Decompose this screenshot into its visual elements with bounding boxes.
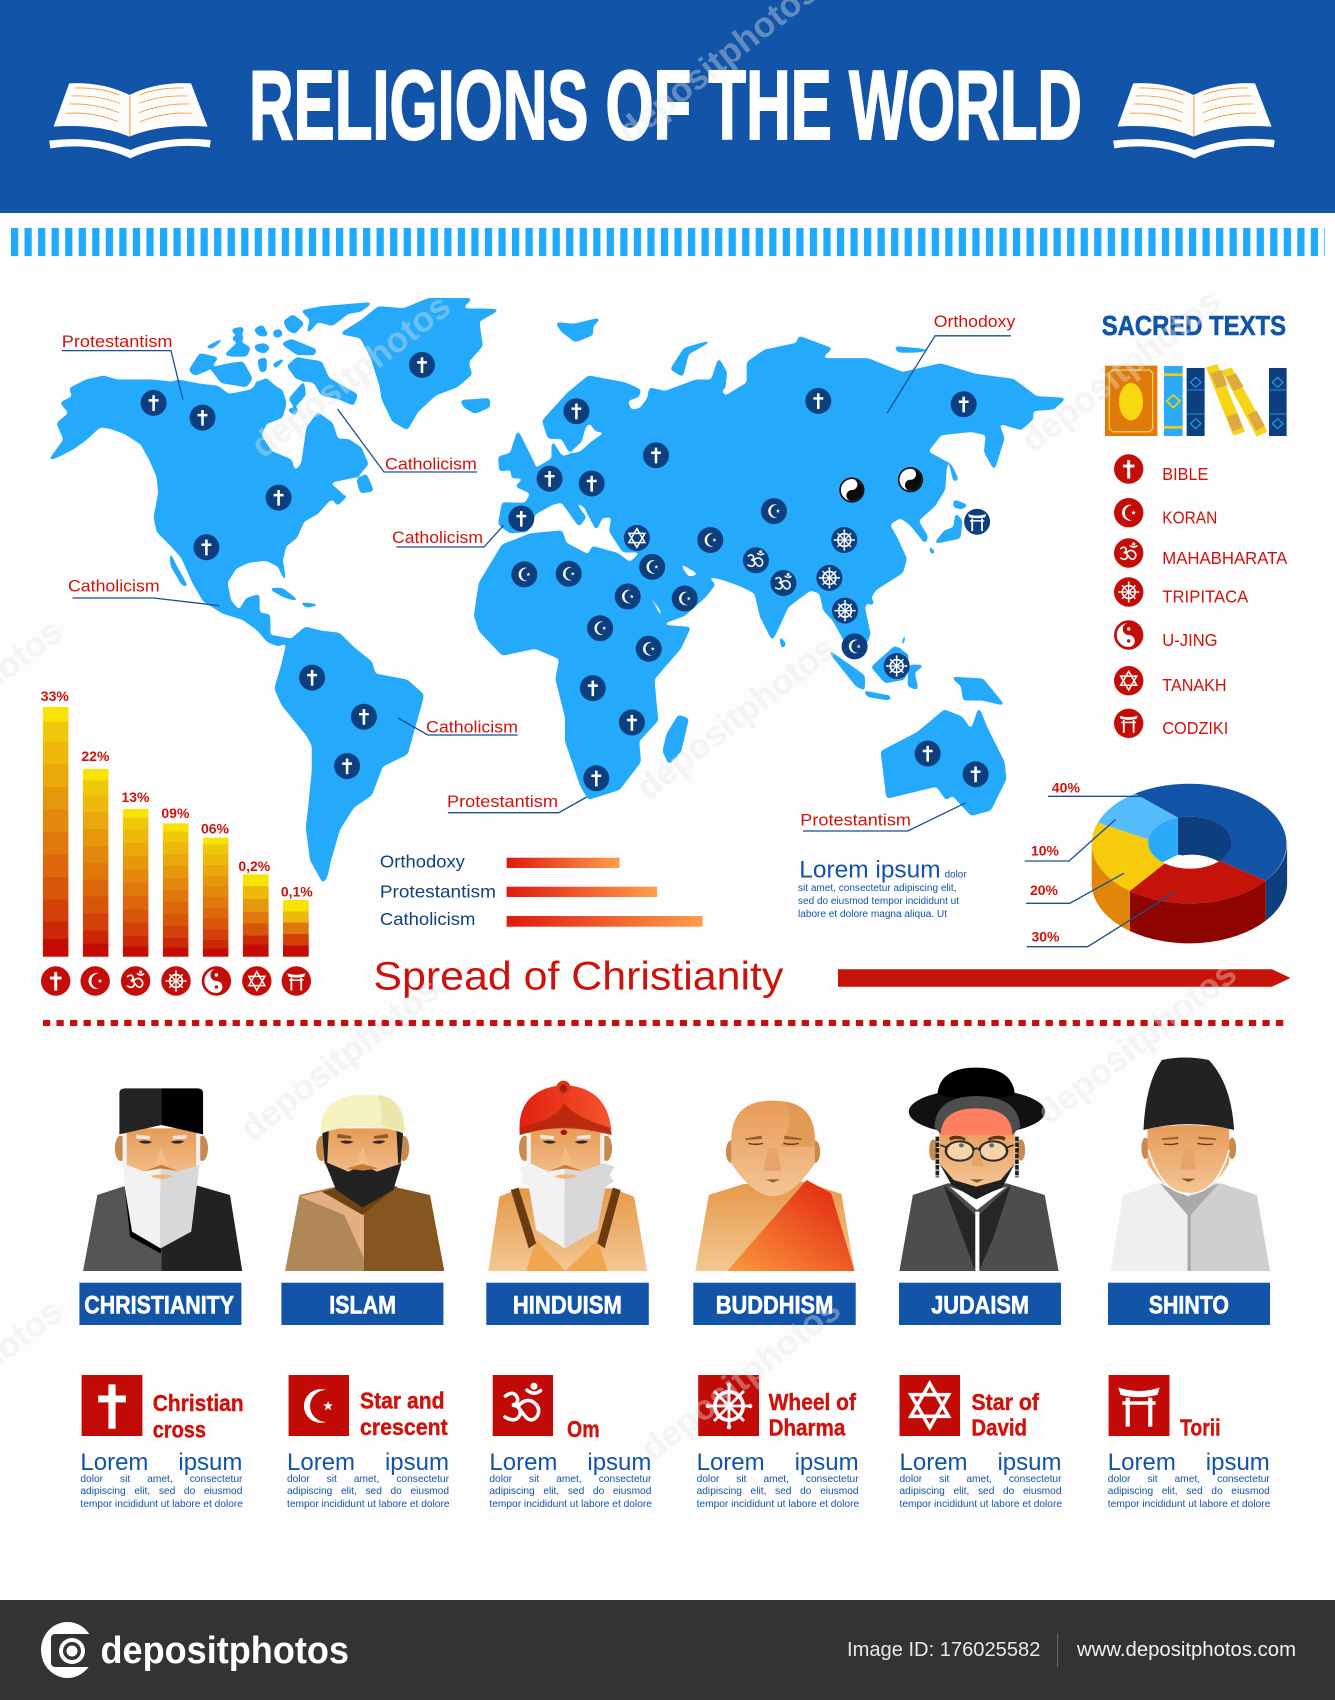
icon: om bbox=[121, 966, 150, 996]
item: Tanakh: TANAKH bbox=[1162, 675, 1227, 695]
description column: wheel of dharma: tempor incididunt ut labore et dolore bbox=[697, 1499, 859, 1510]
pin: wheel, Thailand bbox=[832, 598, 858, 624]
legend row: Protestantism bbox=[380, 882, 657, 902]
pin: crescent, Ethiopia bbox=[636, 636, 662, 662]
icon: open book right bbox=[1113, 83, 1275, 158]
caption: star and crescent bbox=[360, 1387, 448, 1440]
caption: om: Om bbox=[567, 1416, 600, 1442]
callout: Catholicism, Spain bbox=[392, 525, 504, 547]
bar 22% bbox=[81, 748, 110, 957]
figure: Buddhist monk bbox=[695, 1101, 854, 1271]
legend row: Catholicism bbox=[380, 909, 703, 929]
caption: torii: Torii bbox=[1180, 1415, 1220, 1441]
description column: wheel of dharma bbox=[696, 1449, 859, 1510]
label: Shinto bbox=[1108, 1283, 1270, 1325]
item: Mahabharata: MAHABHARATA bbox=[1162, 548, 1288, 568]
pin: wheel, Myanmar bbox=[816, 565, 842, 591]
pin: cross, South Africa bbox=[583, 765, 609, 791]
description column: Christian cross: dolor sit amet, consectetur bbox=[80, 1474, 242, 1485]
description column: star of David: tempor incididunt ut labore et dolore bbox=[900, 1499, 1062, 1510]
caption: Christian cross: cross bbox=[153, 1416, 206, 1442]
text block: lorem ipsum bbox=[798, 856, 967, 920]
bar 33% bbox=[41, 688, 69, 957]
figures: Christianity, Islam, Hinduism bbox=[83, 1081, 647, 1271]
description column: Christian cross: Lorem ipsum bbox=[80, 1449, 242, 1476]
callout: Protestantism, South Africa bbox=[447, 793, 587, 813]
label: Hinduism bbox=[486, 1283, 649, 1325]
description column: star and crescent: tempor incididunt ut labore et dolore bbox=[287, 1499, 450, 1510]
label 20%: 20% bbox=[1030, 882, 1059, 898]
footer image id: Image ID: 176025582 bbox=[847, 1639, 1040, 1661]
Eurasia, Africa and Australia bbox=[475, 318, 1065, 815]
symbol: star of David bbox=[900, 1375, 960, 1436]
description column: star of David: adipiscing elit, sed do eiusmod bbox=[900, 1486, 1062, 1497]
bar 33%: 33% bbox=[41, 688, 69, 704]
figure: Hindu sage bbox=[488, 1081, 647, 1271]
header band bbox=[0, 0, 1335, 213]
pin: cross, Paraguay bbox=[334, 753, 360, 779]
item: Bible bbox=[1114, 454, 1208, 484]
description column: star and crescent: Lorem ipsum bbox=[287, 1449, 449, 1476]
legend row: Catholicism: Catholicism bbox=[380, 909, 475, 929]
footer bar bbox=[0, 1600, 1335, 1700]
description column: star of David bbox=[900, 1449, 1062, 1510]
item: Koran bbox=[1114, 498, 1217, 527]
label: Buddhism: BUDDHISM bbox=[716, 1291, 833, 1319]
pin: cross, France bbox=[537, 466, 563, 492]
pin: star of David, Israel bbox=[624, 525, 650, 551]
label: Islam bbox=[281, 1283, 443, 1325]
figure: Jewish rabbi bbox=[899, 1068, 1059, 1271]
bar 0,2%: 0,2% bbox=[238, 858, 271, 874]
pin: om, Pakistan bbox=[743, 547, 769, 573]
description column: torii: dolor sit amet, consectetur bbox=[1108, 1474, 1270, 1485]
pin: om, India bbox=[770, 570, 796, 596]
label: Judaism bbox=[899, 1283, 1061, 1325]
description column: star and crescent bbox=[287, 1449, 450, 1510]
description column: Christian cross: adipiscing elit, sed do eiusmod bbox=[80, 1486, 242, 1497]
symbol: Christian cross bbox=[82, 1375, 142, 1436]
watermarks: depositphotos bbox=[244, 286, 458, 466]
label 10%: 10% bbox=[1031, 843, 1060, 859]
footer url: www.depositphotos.com bbox=[1076, 1639, 1296, 1661]
callout: Catholicism, Mexico: Catholicism bbox=[68, 577, 160, 595]
caption: star and crescent: Star and bbox=[360, 1387, 444, 1413]
description column: om: adipiscing elit, sed do eiusmod bbox=[489, 1486, 651, 1497]
description column: om: tempor incididunt ut labore et dolore bbox=[489, 1499, 652, 1510]
pin: cross, Poland bbox=[579, 470, 605, 496]
caption: Christian cross bbox=[153, 1390, 244, 1442]
pin: crescent, Chad bbox=[587, 615, 613, 641]
pin: crescent, Malaysia bbox=[842, 633, 868, 659]
legend row: Protestantism: Protestantism bbox=[380, 882, 496, 902]
icon: star bbox=[242, 966, 272, 996]
description column: wheel of dharma: adipiscing elit, sed do eiusmod bbox=[697, 1486, 859, 1497]
description column: om: dolor sit amet, consectetur bbox=[489, 1474, 651, 1485]
pin: cross, Australia east bbox=[963, 761, 989, 787]
pin: wheel, China bbox=[831, 527, 857, 553]
bar 06%: 06% bbox=[201, 820, 230, 836]
bar 0,1%: 0,1% bbox=[281, 883, 313, 899]
pin: cross, Colombia bbox=[299, 665, 325, 691]
legend: denominations bbox=[380, 851, 703, 929]
caption: star of David: Star of bbox=[971, 1389, 1039, 1415]
description column: torii bbox=[1108, 1449, 1270, 1510]
callout: Protestantism, Australia bbox=[800, 803, 966, 831]
footer logo bbox=[41, 1622, 349, 1678]
pin: cross, Russia east bbox=[951, 391, 977, 417]
pin: cross, USA east bbox=[266, 485, 292, 511]
caption: star of David: David bbox=[971, 1415, 1027, 1441]
bar 13%: 13% bbox=[121, 789, 150, 805]
description column: wheel of dharma: dolor sit amet, consectetur bbox=[697, 1474, 859, 1485]
pin: cross, Congo bbox=[580, 675, 606, 701]
caption: star of David bbox=[971, 1389, 1039, 1441]
pin: cross, Tanzania bbox=[619, 710, 645, 736]
watermarks: depositphotos bbox=[1030, 953, 1244, 1133]
sacred texts list bbox=[1114, 454, 1288, 738]
bar 0,2% bbox=[238, 858, 271, 957]
world map bbox=[49, 299, 1065, 882]
text block: lorem ipsum: labore et dolore magna aliqua. Ut bbox=[798, 909, 947, 920]
pin: cross, Greenland bbox=[409, 352, 435, 378]
pin: cross, USA south bbox=[193, 534, 219, 560]
bar 06% bbox=[201, 820, 230, 957]
bar 09%: 09% bbox=[161, 805, 190, 821]
heading: spread of christianity: Spread of Christianity bbox=[373, 954, 783, 998]
description column: torii: tempor incididunt ut labore et dolore bbox=[1108, 1499, 1270, 1510]
bar 0,1% bbox=[281, 883, 313, 957]
item: Bible: BIBLE bbox=[1162, 464, 1208, 484]
pin: crescent, Kazakhstan bbox=[761, 498, 787, 524]
description column: star and crescent: dolor sit amet, consectetur bbox=[287, 1474, 449, 1485]
callout: Catholicism, Brazil: Catholicism bbox=[426, 719, 518, 737]
icon: torii bbox=[282, 966, 311, 996]
item: Tanakh bbox=[1114, 666, 1227, 695]
label: Christianity: CHRISTIANITY bbox=[84, 1291, 234, 1319]
pin: torii, Japan bbox=[964, 509, 990, 535]
footer logo: depositphotos bbox=[100, 1630, 349, 1672]
callout: Catholicism, Spain: Catholicism bbox=[392, 529, 483, 547]
caption: wheel of dharma: Dharma bbox=[769, 1415, 845, 1441]
bar chart bbox=[41, 688, 313, 957]
label: Islam: ISLAM bbox=[329, 1291, 396, 1319]
heading: sacred texts: SACRED TEXTS bbox=[1102, 310, 1286, 341]
pin: yin yang, Manchuria bbox=[898, 467, 923, 492]
figure: Shinto priest bbox=[1111, 1057, 1270, 1271]
item: U-Jing bbox=[1114, 620, 1218, 650]
blue stripe divider bbox=[11, 228, 1325, 256]
item: Tripitaca bbox=[1114, 577, 1249, 607]
description column: star of David: Lorem ipsum bbox=[900, 1449, 1062, 1476]
label: Christianity bbox=[79, 1283, 241, 1325]
bar 22%: 22% bbox=[81, 748, 110, 764]
pin: cross, Alaska bbox=[141, 390, 167, 416]
pin: cross, Australia west bbox=[915, 740, 941, 766]
item: U-Jing: U-JING bbox=[1162, 630, 1218, 650]
callout: Orthodoxy: Orthodoxy bbox=[934, 313, 1016, 331]
text block: lorem ipsum: dolor bbox=[945, 870, 967, 881]
description column: torii: adipiscing elit, sed do eiusmod bbox=[1108, 1486, 1270, 1497]
description column: star of David: dolor sit amet, consectetur bbox=[900, 1474, 1062, 1485]
watermarks: depositphotos bbox=[634, 1289, 848, 1469]
icon: cross bbox=[41, 966, 70, 996]
pin: crescent, Egypt bbox=[615, 584, 641, 610]
pin: cross, Brazil bbox=[351, 704, 377, 730]
icon: yin yang bbox=[202, 966, 231, 996]
pin: cross, Canada bbox=[190, 405, 216, 431]
text block: lorem ipsum: Lorem ipsum bbox=[799, 856, 941, 883]
description column: om bbox=[489, 1449, 652, 1510]
pin: cross, Scandinavia bbox=[563, 398, 589, 424]
description column: star and crescent: adipiscing elit, sed do eiusmod bbox=[287, 1486, 449, 1497]
label: Judaism: JUDAISM bbox=[931, 1291, 1029, 1319]
bar 09% bbox=[161, 805, 190, 957]
text block: lorem ipsum: sed do eiusmod tempor incididunt ut bbox=[798, 896, 959, 907]
item: Tripitaca: TRIPITACA bbox=[1162, 587, 1249, 607]
figures: Buddhism, Judaism, Shinto bbox=[695, 1057, 1270, 1271]
callout: Catholicism, Canada bbox=[338, 409, 477, 473]
item: Codziki bbox=[1114, 709, 1228, 738]
callout: Catholicism, Brazil bbox=[398, 718, 518, 737]
description column: Christian cross bbox=[80, 1449, 243, 1510]
text block: lorem ipsum: sit amet, consectetur adipiscing elit, bbox=[798, 883, 956, 894]
callout: Catholicism, Mexico bbox=[68, 577, 220, 606]
legend row: Orthodoxy bbox=[380, 851, 620, 871]
symbol: torii bbox=[1109, 1375, 1170, 1436]
label: Shinto: SHINTO bbox=[1149, 1291, 1229, 1319]
item: Codziki: CODZIKI bbox=[1162, 718, 1228, 738]
caption: wheel of dharma bbox=[769, 1389, 856, 1441]
watermarks: depositphotos bbox=[629, 628, 843, 808]
caption: Christian cross: Christian bbox=[153, 1390, 244, 1416]
figure: Muslim imam bbox=[285, 1095, 444, 1271]
map pins bbox=[141, 352, 990, 791]
callout: Protestantism, Australia: Protestantism bbox=[800, 812, 911, 830]
bar chart icons bbox=[41, 966, 311, 996]
item: Mahabharata bbox=[1114, 538, 1288, 568]
icon: crescent bbox=[80, 966, 110, 996]
symbol: wheel of dharma bbox=[698, 1375, 759, 1436]
item: Koran: KORAN bbox=[1162, 507, 1217, 527]
figure: Christian priest bbox=[83, 1088, 242, 1271]
pin: wheel, Borneo bbox=[884, 653, 910, 679]
red dotted divider bbox=[43, 1020, 1287, 1026]
watermarks: depositphotos bbox=[1014, 281, 1228, 461]
label 40%: 40% bbox=[1052, 780, 1081, 796]
pin: cross, Russia west bbox=[643, 442, 669, 468]
donut chart bbox=[1025, 780, 1287, 947]
description column: wheel of dharma: Lorem ipsum bbox=[697, 1449, 859, 1476]
icon: open book left bbox=[49, 83, 211, 158]
pin: crescent, Algeria bbox=[511, 561, 537, 587]
pin: crescent, Libya bbox=[556, 561, 582, 587]
description column: om: Lorem ipsum bbox=[489, 1449, 651, 1476]
callout: Orthodoxy bbox=[887, 313, 1016, 413]
label: Hinduism: HINDUISM bbox=[513, 1291, 622, 1319]
callout: Protestantism, Canada: Protestantism bbox=[62, 333, 172, 351]
description column: torii: Lorem ipsum bbox=[1108, 1449, 1270, 1476]
caption: star and crescent: crescent bbox=[360, 1414, 448, 1440]
symbol: om bbox=[493, 1375, 553, 1436]
label: Buddhism bbox=[693, 1283, 856, 1325]
label 30%: 30% bbox=[1032, 929, 1060, 945]
watermarks: depositphotos bbox=[233, 969, 447, 1149]
symbol: star and crescent bbox=[289, 1375, 349, 1436]
pin: cross, Spain bbox=[508, 506, 534, 532]
pin: crescent, Arabia bbox=[672, 586, 698, 612]
pin: cross, Siberia bbox=[805, 388, 831, 414]
caption: wheel of dharma: Wheel of bbox=[769, 1389, 856, 1415]
pin: crescent, Iraq bbox=[639, 554, 665, 580]
callout: Protestantism, Canada bbox=[62, 333, 183, 400]
legend row: Orthodoxy: Orthodoxy bbox=[380, 851, 465, 871]
icon: wheel bbox=[161, 966, 191, 996]
Americas bbox=[49, 299, 498, 882]
pin: crescent, Iran bbox=[697, 527, 723, 553]
description column: Christian cross: tempor incididunt ut labore et dolore bbox=[80, 1499, 243, 1510]
callout: Catholicism, Canada: Catholicism bbox=[385, 455, 477, 473]
books illustration bbox=[1105, 364, 1287, 437]
pin: yin yang, Mongolia bbox=[839, 477, 864, 503]
callout: Protestantism, South Africa: Protestantism bbox=[447, 793, 558, 811]
arrow bbox=[838, 969, 1290, 987]
bar 13% bbox=[121, 789, 150, 957]
